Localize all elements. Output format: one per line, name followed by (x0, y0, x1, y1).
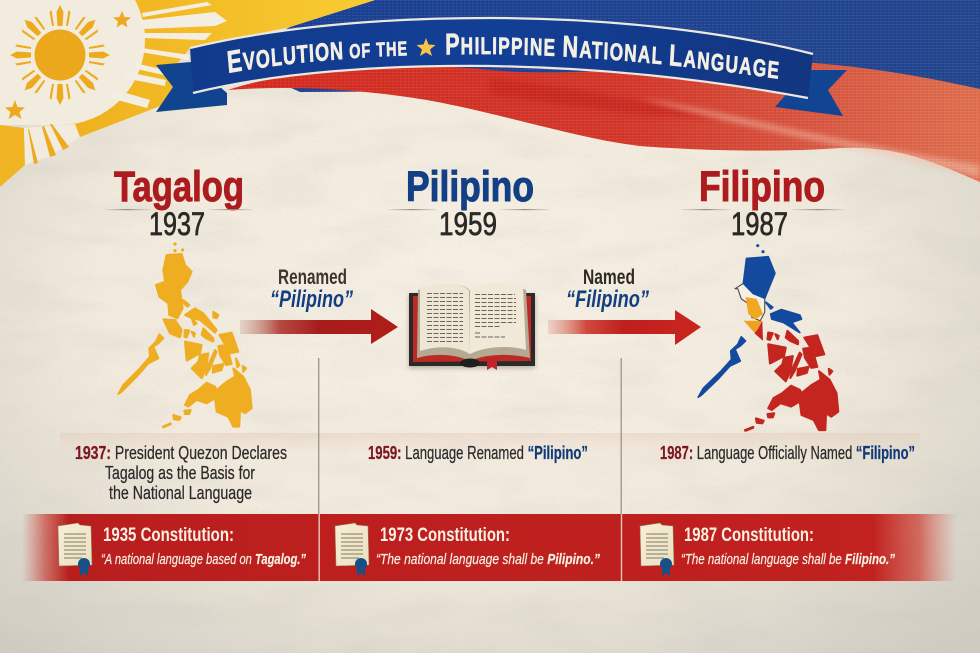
banner: left tail (156, 62, 227, 112)
column dividers (318, 358, 622, 581)
text: 1987 event: 1987: Language Officially Named “Filipino” (660, 443, 915, 463)
arrow: renamed (240, 309, 398, 344)
arrow label: Named: Named (583, 266, 635, 289)
arrow: named (548, 310, 701, 345)
heading: Tagalog: Tagalog (114, 163, 244, 211)
banner: right tail (775, 70, 847, 116)
map: yellow Philippines (118, 243, 252, 427)
flag: yellow stripe with sun field (0, 0, 375, 187)
flag: blue stripe (230, 0, 980, 92)
heading rules (105, 209, 844, 210)
red constitution band (22, 514, 957, 581)
year: 1987: 1987 (731, 206, 788, 242)
title: left part: EVOLUTION OF THE (227, 41, 407, 74)
icon: sun (10, 5, 110, 105)
text: 1937 event (75, 443, 287, 503)
text: 1937 event: 1937: President Quezon Declares (75, 443, 287, 463)
text: 1935 constitution (101, 525, 306, 568)
title: right part: PHILIPPINE NATIONAL LANGUAGE (446, 33, 779, 79)
icon: document 1987 (640, 523, 674, 576)
heading: Pilipino: Pilipino (406, 163, 534, 211)
text: 1959 event: 1959: Language Renamed “Pilipino” (368, 443, 588, 463)
banner: ribbon (190, 18, 813, 98)
map: tricolor Philippines (698, 245, 838, 431)
text: 1987 constitution: “The national language shall be Filipino.” (681, 551, 895, 568)
text: 1987 constitution: 1987 Constitution: (684, 525, 814, 546)
text: 1973 constitution: 1973 Constitution: (380, 525, 510, 546)
icon: open book (409, 283, 535, 370)
icon: document 1973 (335, 523, 369, 576)
text: 1987 constitution (681, 525, 895, 568)
text: 1937 event: the National Language (109, 483, 252, 503)
text: 1937 event: Tagalog as the Basis for (105, 463, 255, 483)
arrow label: Filipino: “Filipino” (566, 286, 649, 313)
year: 1959: 1959 (439, 206, 497, 242)
title: star (416, 38, 436, 56)
flag: red stripe (228, 61, 980, 182)
text: 1935 constitution: 1935 Constitution: (103, 525, 234, 546)
text: 1973 constitution (376, 525, 600, 568)
arrow label: Renamed: Renamed (278, 266, 347, 289)
arrow label: Pilipino: “Pilipino” (270, 286, 353, 313)
icon: star top (113, 11, 131, 28)
text: 1935 constitution: “A national language based on Tagalog.” (101, 551, 306, 568)
heading: Filipino: Filipino (699, 163, 825, 211)
year: 1937: 1937 (149, 206, 205, 242)
icon: document 1935 (58, 523, 92, 576)
icon: star bottom left (5, 100, 25, 119)
text: 1973 constitution: “The national language shall be Pilipino.” (376, 551, 600, 568)
